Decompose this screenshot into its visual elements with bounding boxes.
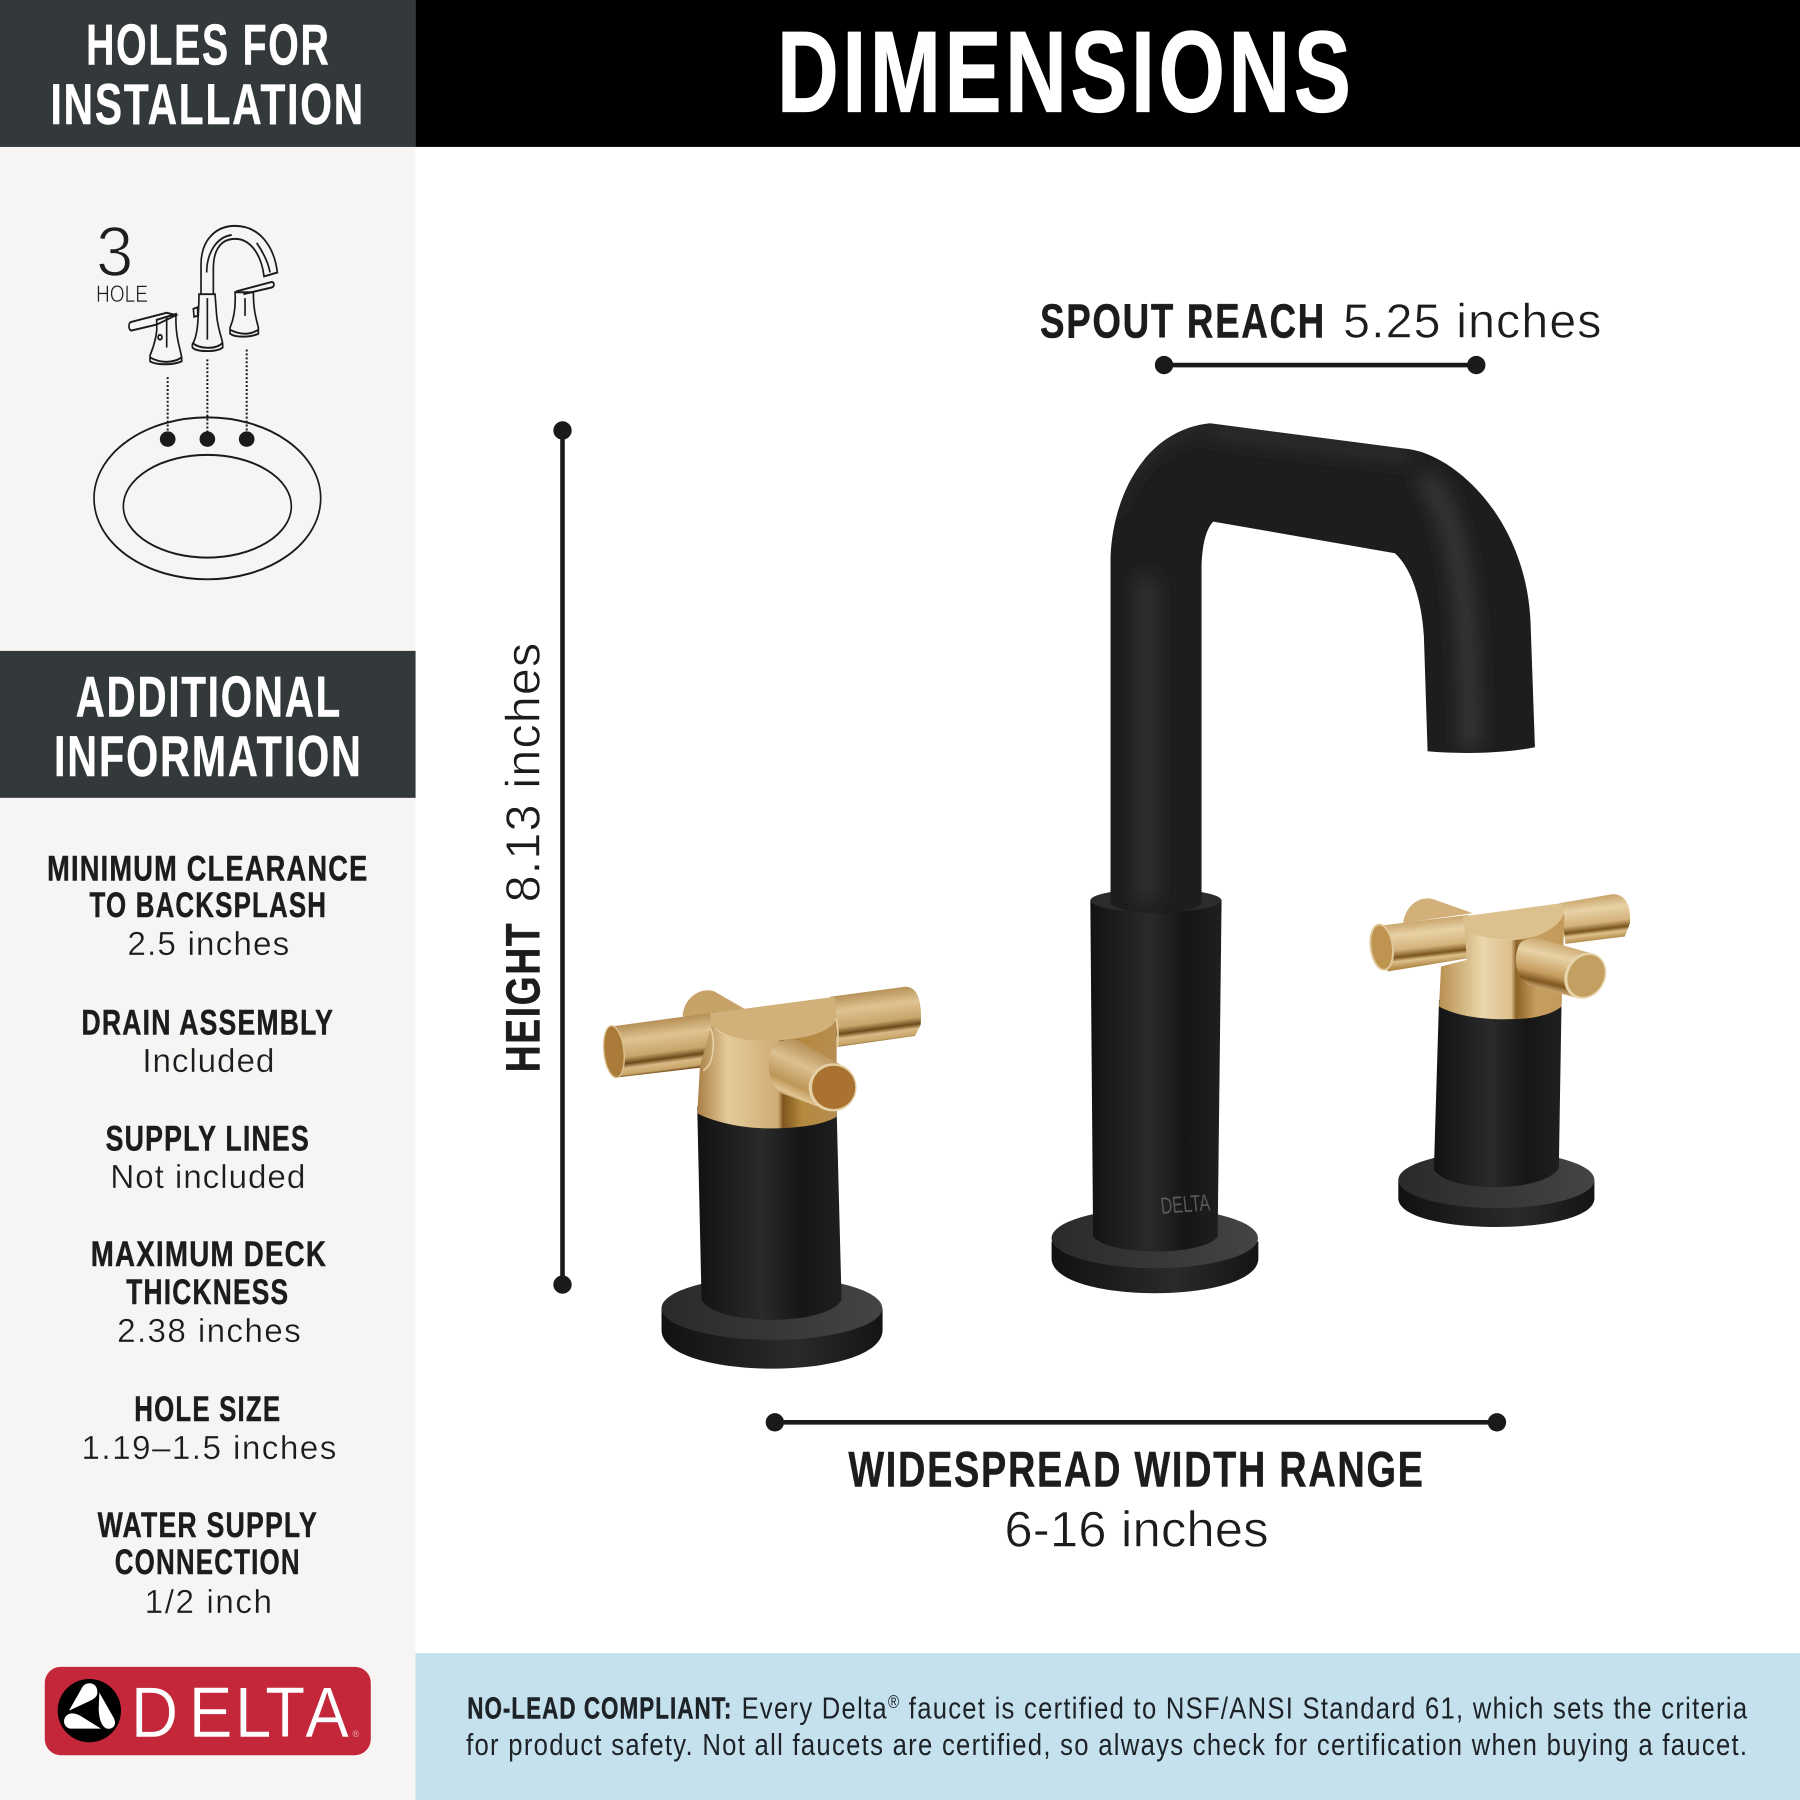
left cross handle in gold bbox=[601, 987, 921, 1128]
small faucet drawing bbox=[129, 226, 277, 364]
right cross handle in gold bbox=[1368, 894, 1630, 1019]
no-lead compliance note: Every Delta bbox=[742, 1690, 919, 1725]
dimension: height bbox=[497, 421, 572, 1294]
spec: maximum deck thickness: MAXIMUM DECK bbox=[91, 1234, 327, 1274]
spec: minimum clearance: MINIMUM CLEARANCE bbox=[47, 848, 368, 888]
heading: holes for installation: HOLES FOR bbox=[86, 13, 331, 77]
no-lead compliance note bbox=[416, 1653, 1800, 1800]
dimension: spout reach: 5.25 inches bbox=[1343, 294, 1601, 348]
spec: maximum deck thickness: THICKNESS bbox=[126, 1272, 289, 1312]
spec: hole size bbox=[82, 1389, 336, 1467]
spec: minimum clearance bbox=[47, 848, 368, 963]
dimension: spout reach bbox=[1040, 294, 1601, 374]
top title bar bbox=[416, 0, 1800, 147]
dimension: spout reach: SPOUT REACH bbox=[1040, 294, 1326, 348]
dimension: widespread width range: WIDESPREAD WIDTH RANGE bbox=[848, 1441, 1425, 1498]
no-lead compliance note: ® bbox=[888, 1691, 900, 1712]
label: 3 hole: 3 bbox=[96, 212, 133, 291]
spec: minimum clearance: TO BACKSPLASH bbox=[90, 885, 327, 925]
spec: supply lines: Not included bbox=[110, 1159, 305, 1196]
icon: 3 hole sink diagram bbox=[94, 212, 321, 579]
dimension: widespread width range: 6-16 inches bbox=[1004, 1500, 1268, 1557]
dimension: widespread width range bbox=[766, 1413, 1506, 1557]
dimension: height: HEIGHT bbox=[497, 922, 551, 1072]
spec: drain assembly: DRAIN ASSEMBLY bbox=[82, 1002, 334, 1042]
logo: Delta bbox=[45, 1667, 371, 1755]
center sleeve and base: DELTA bbox=[1159, 1190, 1212, 1219]
spec: water supply connection: 1/2 inch bbox=[145, 1584, 272, 1621]
additional information list bbox=[47, 848, 368, 1621]
spec: water supply connection: CONNECTION bbox=[115, 1542, 301, 1582]
spec: drain assembly bbox=[82, 1002, 334, 1080]
sink outline bbox=[94, 349, 321, 579]
spec: drain assembly: Included bbox=[142, 1043, 274, 1080]
heading: additional information: ADDITIONAL bbox=[76, 665, 342, 729]
spec: supply lines: SUPPLY LINES bbox=[106, 1118, 310, 1158]
spec: supply lines bbox=[106, 1118, 310, 1196]
logo: Delta: ® bbox=[352, 1729, 359, 1739]
spec: water supply connection bbox=[98, 1505, 318, 1621]
spec: hole size: HOLE SIZE bbox=[134, 1389, 281, 1429]
label: 3 hole bbox=[96, 212, 148, 308]
title: DIMENSIONS bbox=[777, 8, 1355, 136]
right handle base bbox=[1398, 1000, 1594, 1227]
left handle base bbox=[662, 1107, 883, 1369]
heading: holes for installation: INSTALLATION bbox=[51, 73, 365, 137]
heading: additional information bbox=[0, 651, 416, 798]
center sleeve and base bbox=[1052, 889, 1258, 1293]
heading: holes for installation bbox=[0, 0, 416, 147]
logo: Delta: DELTA bbox=[131, 1673, 349, 1752]
spec: hole size: 1.19–1.5 inches bbox=[82, 1430, 336, 1467]
spec: maximum deck thickness bbox=[91, 1234, 327, 1350]
spec: water supply connection: WATER SUPPLY bbox=[98, 1505, 318, 1545]
dimension: height: 8.13 inches bbox=[497, 643, 551, 902]
label: 3 hole: HOLE bbox=[96, 279, 148, 308]
spec: minimum clearance: 2.5 inches bbox=[127, 926, 289, 963]
faucet illustration bbox=[601, 423, 1630, 1369]
logo mark bbox=[58, 1679, 121, 1742]
no-lead compliance note: NO-LEAD COMPLIANT: bbox=[467, 1690, 732, 1725]
left sidebar background bbox=[0, 0, 416, 1800]
spec: maximum deck thickness: 2.38 inches bbox=[117, 1313, 301, 1350]
heading: additional information: INFORMATION bbox=[54, 725, 363, 789]
center spout bbox=[1110, 423, 1535, 913]
